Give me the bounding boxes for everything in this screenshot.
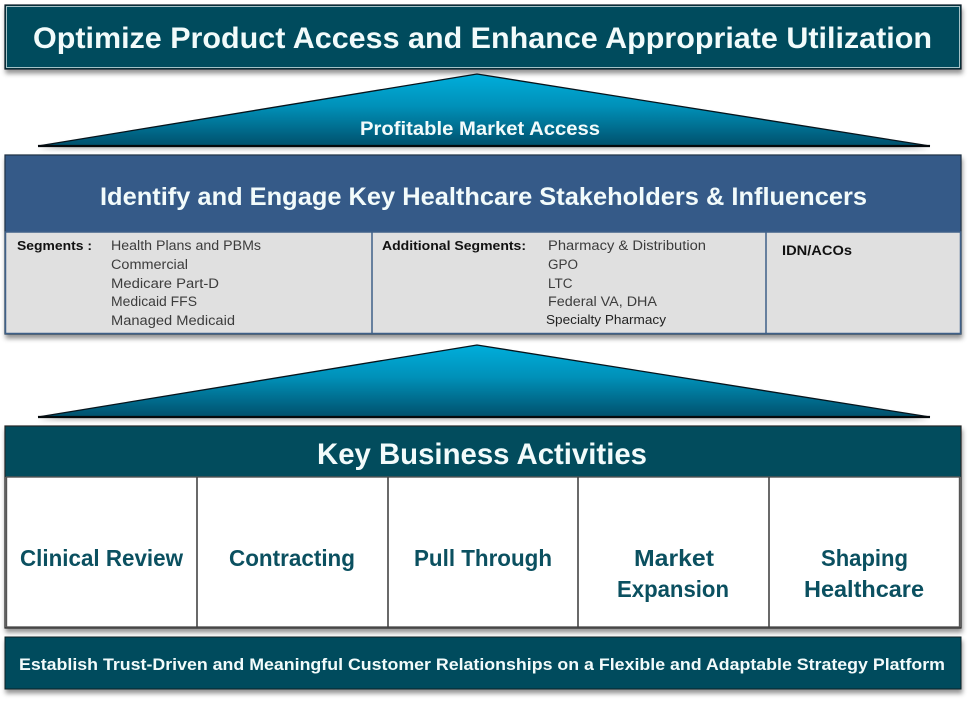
activity: shaping healthcare: [804, 545, 924, 602]
activity: shaping healthcare: Healthcare: [804, 576, 924, 602]
column: additional segments: LTC: [548, 276, 573, 291]
title: Optimize Product Access and Enhance Appropriate Utilization: [33, 22, 932, 55]
column: segments: [17, 238, 261, 328]
activity: clinical review: Clinical Review: [20, 545, 183, 571]
column: additional segments: Specialty Pharmacy: [546, 313, 667, 327]
column: additional segments: [382, 238, 706, 327]
panel header: [6, 426, 960, 477]
column: additional segments: Federal VA, DHA: [548, 294, 657, 309]
activity: contracting: Contracting: [229, 545, 355, 571]
arrow: lower triangle: [38, 345, 930, 417]
column: segments: Health Plans and PBMs: [111, 238, 261, 253]
activity: market expansion: Market: [634, 545, 714, 571]
bottom banner: foundation: [5, 637, 961, 689]
column: additional segments: GPO: [548, 257, 578, 272]
column: segments: Medicare Part-D: [111, 276, 219, 291]
panel: key business activities: [5, 426, 961, 628]
activity: shaping healthcare: Shaping: [821, 545, 908, 571]
panel header: Identify and Engage Key Healthcare Stakeholders & Influencers: [100, 183, 867, 211]
arrow: upper triangle with label: [38, 74, 930, 146]
column: segments: Medicaid FFS: [111, 294, 197, 309]
label: profitable market access: Profitable Market Access: [360, 119, 600, 140]
activity: pull through: Pull Through: [414, 545, 552, 571]
column: segments: Managed Medicaid: [111, 313, 235, 328]
foundation text: Establish Trust-Driven and Meaningful Customer Relationships on a Flexible and Adaptable Strategy Platform: [19, 655, 945, 674]
panel header: [6, 156, 960, 232]
top banner: goal: [5, 5, 961, 69]
column: IDN/ACOs: IDN/ACOs: [782, 242, 852, 258]
column: additional segments: Pharmacy & Distribution: [548, 238, 706, 253]
column: segments: Segments :: [17, 238, 92, 253]
panel header: Key Business Activities: [317, 438, 647, 471]
activity: market expansion: Expansion: [617, 576, 729, 602]
column: additional segments: Additional Segments:: [382, 238, 526, 253]
activity: market expansion: [617, 545, 729, 602]
column: segments: Commercial: [111, 257, 188, 272]
panel: stakeholders: [5, 155, 961, 334]
